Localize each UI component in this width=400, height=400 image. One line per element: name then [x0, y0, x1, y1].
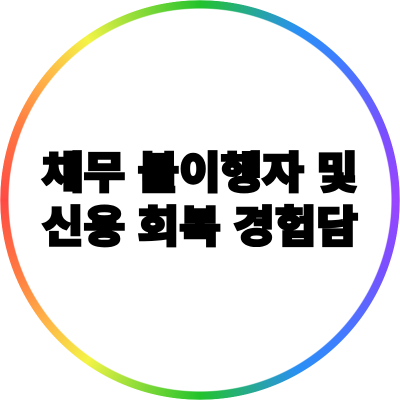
title: 채무 불이행자 및	[42, 150, 358, 198]
title: 신용 회복 경험담	[42, 204, 358, 252]
title	[40, 150, 358, 252]
